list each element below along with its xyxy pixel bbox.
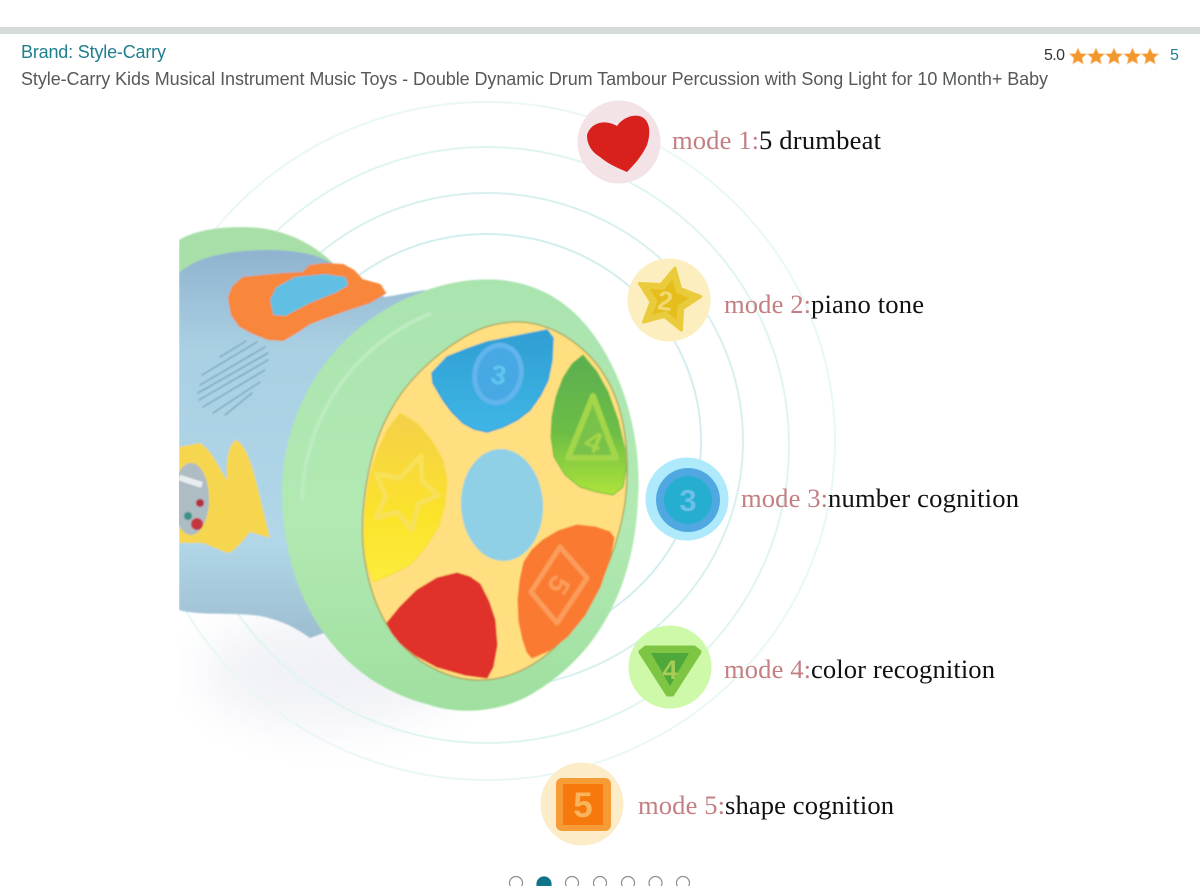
- icon: triangle 4: 4: [662, 655, 678, 685]
- mode 2 label: piano tone: [811, 289, 924, 319]
- icon: heart: [578, 100, 660, 184]
- mode 3 label: number cognition: [828, 483, 1019, 513]
- review count: 5: [1170, 47, 1179, 64]
- mode 4 label: color recognition: [811, 654, 995, 684]
- green pad: 4: [580, 425, 607, 461]
- mode 5 label: mode 5:: [638, 790, 725, 820]
- brand line: Brand: Style-Carry: [21, 42, 166, 62]
- center pad: [458, 447, 546, 563]
- mode 3 label: [741, 483, 1019, 513]
- top divider bar: [0, 27, 1200, 34]
- orange pad: 5: [540, 570, 576, 599]
- icon: star: [628, 258, 710, 342]
- icon: number 3: 3: [679, 483, 697, 518]
- mode 5 item: [540, 762, 894, 846]
- mode 1 label: mode 1:: [672, 125, 759, 155]
- blue pad: [432, 330, 553, 432]
- orange pad: [518, 525, 614, 658]
- orange handle: [229, 264, 385, 340]
- mode 3 label: mode 3:: [741, 483, 828, 513]
- drum front rim: [282, 279, 639, 711]
- rim highlight: [302, 314, 430, 500]
- red pad: [387, 573, 497, 678]
- mode 3 item: [646, 458, 1019, 540]
- carousel dots: [510, 876, 690, 886]
- speaker grille: [198, 341, 268, 415]
- product title: Style-Carry Kids Musical Instrument Music Toys - Double Dynamic Drum Tambour Percussion with Song Light for 10 Month+ Baby: [21, 69, 1048, 89]
- mode 1 label: 5 drumbeat: [759, 125, 882, 155]
- mode 5 label: [638, 790, 894, 820]
- toy drum: [173, 227, 639, 711]
- mode 2 label: [724, 289, 924, 319]
- yellow pad: [364, 413, 447, 582]
- mode 2 item: [628, 258, 924, 342]
- toy shadow: [216, 626, 419, 721]
- drum body: [179, 250, 425, 638]
- rattle beads: [178, 475, 204, 530]
- mode 1 item: [578, 100, 882, 184]
- icon: square 5: 5: [573, 786, 593, 825]
- mode 4 item: [628, 626, 995, 708]
- green pad: [551, 355, 626, 495]
- mode 4 label: mode 4:: [724, 654, 811, 684]
- handle button: [271, 275, 347, 315]
- header: [21, 42, 1179, 89]
- mode 1 label: [672, 125, 882, 155]
- mode 4 label: [724, 654, 995, 684]
- sound rings: [139, 102, 835, 780]
- rating score: 5.0: [1044, 47, 1065, 64]
- mode 5 label: shape cognition: [725, 790, 894, 820]
- yellow horn rattle: [179, 440, 270, 553]
- icon: square 5: [540, 762, 624, 846]
- rattle window: [179, 462, 210, 536]
- mode 2 label: mode 2:: [724, 289, 811, 319]
- icon: star: 2: [656, 285, 675, 317]
- blue pad: 3: [489, 359, 509, 391]
- icon: number 3: [646, 458, 728, 540]
- icon: triangle 4: [628, 626, 712, 708]
- rating stars: [1070, 48, 1158, 64]
- drum back rim: [179, 226, 334, 274]
- drum face: [362, 322, 627, 680]
